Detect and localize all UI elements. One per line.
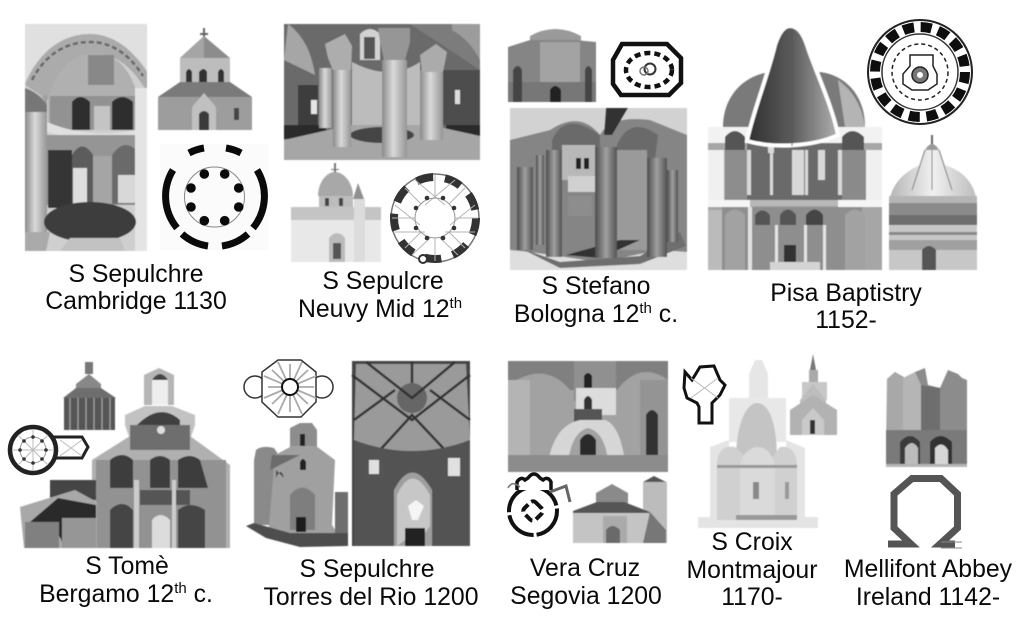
panel: S Stefano Bologna [508,29,687,328]
plan: Vera Cruz plan [508,474,570,535]
label: S Sepulchre Cambridge 1130: Cambridge 1130 [45,288,227,315]
panel: S Sepulcre Neuvy [284,24,480,323]
label: Mellifont Abbey Ireland 1142- [844,556,1013,611]
elevation: Montmajour exterior [790,354,837,435]
label: S Tomè Bergamo 12th c. [39,553,213,608]
label: S Sepulcre Neuvy Mid 12th [298,268,462,323]
label: Vera Cruz Segovia 1200: Vera Cruz [530,555,640,582]
elevation: Pisa exterior [889,135,977,270]
photo: Bologna exterior [508,29,596,102]
plan: S Tomè plan [10,427,88,473]
panel: S Tomè Bergamo [10,362,230,608]
section: Montmajour cutaway [698,360,818,528]
label: S Tomè Bergamo 12th c.: th [174,580,187,597]
label: S Stefano Bologna 12th c. [514,273,678,328]
label: S Croix Montmajour 1170-: 1170- [721,584,783,611]
panel: Pisa Baptistry [708,20,977,334]
plan: Neuvy vaulted plan [391,174,479,263]
label: Pisa Baptistry 1152-: 1152- [815,307,877,334]
label: S Sepulchre Cambridge 1130 [45,261,227,315]
plan: Pisa circular plan [868,20,972,124]
label: S Croix Montmajour 1170-: S Croix [711,529,793,556]
label: S Stefano Bologna 12th c.: S Stefano [542,273,650,300]
label: S Sepulcre Neuvy Mid 12th: th [450,295,462,312]
photo: Bologna interior columns [510,108,687,270]
panel: Mellifont Abbey Ireland [844,368,1013,611]
elevation: S Tomè small exterior [63,362,116,430]
photo: Vera Cruz interior engraving [508,361,668,472]
label: S Croix Montmajour 1170-: Montmajour [687,557,817,584]
label: Pisa Baptistry 1152- [770,280,922,334]
photo: Torres del Rio exterior [246,423,348,547]
label: Pisa Baptistry 1152-: Pisa Baptistry [770,280,922,307]
panel: Vera Cruz Segovia [508,361,668,610]
section: S Tomè cutaway [20,368,230,548]
label: S Tomè Bergamo 12th c.: Bergamo 12 [39,581,174,608]
label: S Sepulcre Neuvy Mid 12th: Neuvy Mid 12 [298,296,450,323]
elevation: Vera Cruz exterior [573,476,667,543]
plan: Montmajour plan [684,366,725,423]
panel: S Sepulchre Torres del Rio [244,360,479,611]
photo: Cambridge interior engraving [25,24,147,251]
label: S Sepulcre Neuvy Mid 12th: S Sepulcre [322,268,444,295]
plan: Torres del Rio plan [244,360,333,417]
label: S Croix Montmajour 1170- [687,529,817,611]
panel: S Croix Montmajour [684,354,837,611]
photo: Torres del Rio interior vault [352,361,470,546]
label: Mellifont Abbey Ireland 1142-: Mellifont Abbey [844,556,1013,583]
label: S Sepulchre Torres del Rio 1200: Torres del Rio 1200 [263,584,479,611]
plan: Bologna octagonal plan [613,44,681,95]
label: S Sepulchre Torres del Rio 1200 [263,556,479,611]
plan: Mellifont octagon plan [888,478,962,548]
section: Pisa Baptistry cutaway [708,26,882,270]
label: S Stefano Bologna 12th c.: Bologna 12 [514,301,639,328]
elevation: Cambridge exterior [158,28,252,130]
label: S Sepulchre Cambridge 1130: S Sepulchre [68,261,204,288]
label: S Tomè Bergamo 12th c.: c. [187,581,213,608]
label: S Sepulchre Torres del Rio 1200: S Sepulchre [299,556,435,583]
label: Vera Cruz Segovia 1200: Segovia 1200 [510,583,662,610]
label: S Stefano Bologna 12th c.: th [639,300,652,317]
panel: S Sepulchre Cambridge [25,24,268,315]
photo: Mellifont lavabo ruin [886,368,967,467]
photo: Neuvy interior columns [284,24,480,160]
label: Mellifont Abbey Ireland 1142-: Ireland 1142- [856,584,1000,611]
plan: Cambridge circular plan [160,144,268,250]
elevation: Neuvy exterior [291,163,381,262]
label: S Tomè Bergamo 12th c.: S Tomè [85,553,169,580]
label: Vera Cruz Segovia 1200 [510,555,662,610]
label: S Stefano Bologna 12th c.: c. [652,301,678,328]
